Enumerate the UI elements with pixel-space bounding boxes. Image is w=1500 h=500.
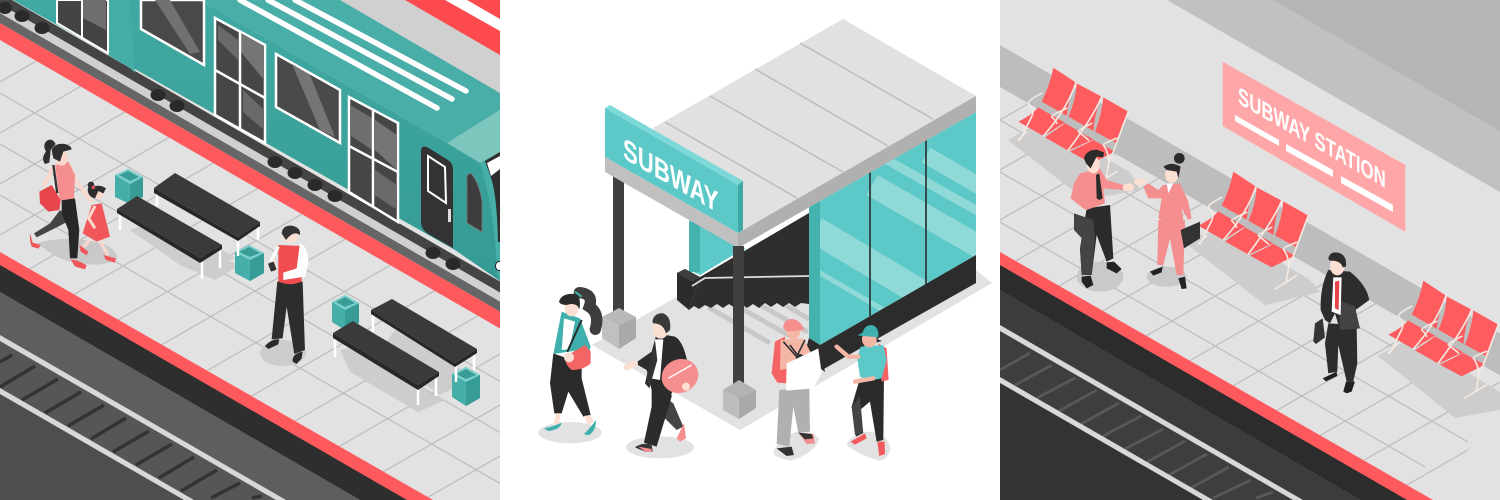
stair opening bbox=[677, 213, 809, 310]
roof stripes bbox=[240, 0, 466, 108]
person: woman in pink suit bbox=[1134, 153, 1200, 289]
bin 1 bbox=[115, 169, 143, 204]
bench and bin shadows bbox=[130, 210, 475, 412]
window: double left bbox=[57, 0, 108, 53]
train wheels bbox=[0, 2, 460, 270]
benches bbox=[117, 173, 477, 405]
window: four pane bbox=[215, 18, 265, 143]
rails and sleepers bbox=[0, 335, 286, 500]
seat shadows bbox=[1008, 122, 1500, 418]
roof bbox=[653, 19, 976, 248]
lower platform edge and pit bbox=[0, 252, 433, 500]
lower platform edge and pit bbox=[1000, 252, 1433, 500]
handrail bbox=[692, 276, 809, 286]
sign: SUBWAY STATION: SUBWAY STATION bbox=[1238, 81, 1386, 194]
roof fascia bbox=[738, 96, 976, 248]
panel: subway station platform bbox=[1000, 0, 1500, 500]
glass wall bbox=[820, 112, 976, 345]
wall dado band bbox=[1000, 45, 1500, 376]
car joint bbox=[108, 0, 135, 73]
bin 4 bbox=[452, 367, 480, 406]
bin 3 bbox=[332, 295, 359, 330]
platform tile grid bbox=[0, 60, 500, 498]
platform edge and track bed near train bbox=[0, 0, 500, 328]
person: man in black jacket bbox=[626, 313, 704, 458]
cab side window bbox=[467, 174, 482, 232]
right post and base bbox=[723, 246, 756, 419]
glass corner pillar bbox=[809, 201, 820, 345]
windshield bbox=[485, 152, 500, 242]
cab door bbox=[421, 146, 453, 248]
people: mother and girl bbox=[30, 140, 117, 269]
seat row 3 bbox=[1388, 281, 1498, 398]
bins bbox=[115, 169, 480, 406]
sign: SUBWAY bbox=[605, 105, 743, 248]
bench back right bbox=[371, 299, 477, 382]
sign: SUBWAY: SUBWAY bbox=[623, 131, 719, 220]
window: single bbox=[141, 0, 204, 65]
train side bbox=[13, 0, 500, 281]
cab roof bbox=[447, 110, 500, 163]
stair side wall teal bbox=[689, 220, 745, 275]
sleepers bbox=[0, 355, 262, 498]
left post and base bbox=[602, 172, 636, 349]
person: businessman in black suit bbox=[1313, 252, 1369, 393]
bin 2 bbox=[235, 245, 264, 281]
headlamp bbox=[496, 262, 502, 270]
rails and sleepers bbox=[1000, 325, 1303, 500]
person: station attendant bbox=[265, 225, 308, 364]
sleepers bbox=[1000, 353, 1273, 498]
cab front strip bbox=[480, 161, 500, 281]
person: tourist with map bbox=[772, 319, 822, 461]
panel: subway entrance bbox=[538, 19, 992, 460]
bench back left bbox=[154, 173, 260, 256]
panel: train at platform bbox=[0, 0, 500, 500]
upper wall bands bbox=[1167, 0, 1500, 192]
ground slab bbox=[592, 270, 992, 430]
black base bbox=[809, 255, 976, 370]
stair steps bbox=[708, 305, 809, 343]
back wall with red stripes bbox=[200, 0, 500, 173]
person: man in pink shirt bbox=[1071, 150, 1134, 292]
window: four pane front bbox=[349, 97, 398, 222]
seat row 2 bbox=[1198, 172, 1308, 289]
bench front left bbox=[117, 196, 222, 279]
seat row 1 bbox=[1018, 68, 1128, 185]
person: tourist with teal cap bbox=[837, 325, 891, 461]
bench front right bbox=[333, 321, 439, 405]
train body bbox=[13, 0, 502, 281]
sign: SUBWAY STATION bbox=[1223, 62, 1405, 232]
person: woman with ponytail bbox=[538, 292, 602, 443]
floor tile grid bbox=[1000, 104, 1500, 486]
train roof bbox=[200, 0, 500, 143]
window: wide single bbox=[276, 54, 340, 143]
